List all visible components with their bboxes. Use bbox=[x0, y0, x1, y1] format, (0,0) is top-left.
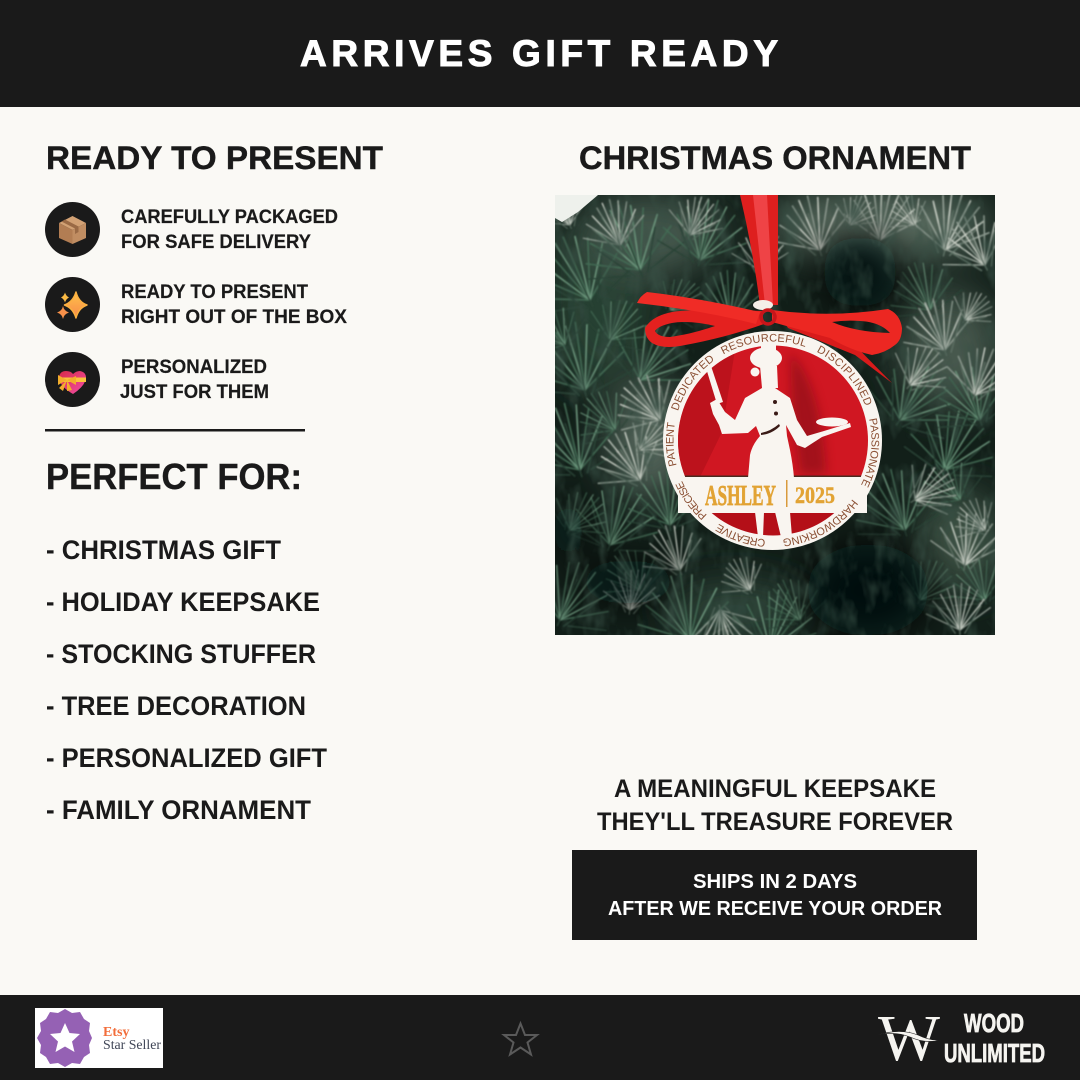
engraved ring words: PATIENT bbox=[666, 422, 676, 466]
benefit: carefully packaged bbox=[45, 202, 338, 257]
list: perfect for items: - HOLIDAY KEEPSAKE bbox=[46, 587, 320, 617]
logo: wood unlimited: WOOD bbox=[964, 1008, 1024, 1038]
ribbon: bow bbox=[637, 292, 902, 383]
badge: etsy star seller: Etsy bbox=[103, 1025, 129, 1040]
benefit: personalized bbox=[45, 352, 269, 407]
title: ARRIVES GIFT READY bbox=[300, 33, 778, 74]
name band bbox=[678, 477, 867, 513]
right tail bbox=[786, 322, 892, 383]
list: perfect for items: - STOCKING STUFFER bbox=[46, 639, 316, 669]
ribbon: hanging strap bbox=[740, 195, 778, 305]
benefit text: RIGHT OUT OF THE BOX bbox=[121, 306, 347, 328]
heading: perfect for: PERFECT FOR: bbox=[46, 456, 302, 497]
engraved ring words: PASSIONATE bbox=[861, 418, 880, 488]
engraved ring words: PRECISE bbox=[676, 481, 706, 520]
footer bar bbox=[0, 995, 1080, 1080]
benefit text: FOR SAFE DELIVERY bbox=[121, 231, 311, 253]
frosted tufts bbox=[778, 195, 848, 256]
heading: ready to present: READY TO PRESENT bbox=[46, 140, 383, 176]
tagline: THEY'LL TREASURE FOREVER bbox=[597, 808, 953, 836]
list: perfect for items: - TREE DECORATION bbox=[46, 691, 306, 721]
engraved ring words: DEDICATED bbox=[671, 356, 713, 410]
logo: wood unlimited: W bbox=[878, 1002, 941, 1075]
logo: wood unlimited bbox=[878, 1002, 1045, 1075]
benefit text bbox=[121, 281, 347, 328]
chef silhouette bbox=[706, 336, 851, 537]
icon: package box bbox=[45, 202, 100, 257]
green tufts bbox=[555, 235, 626, 312]
photo: ornament on pine tree bbox=[555, 195, 995, 635]
shipping callout: AFTER WE RECEIVE YOUR ORDER bbox=[608, 898, 943, 920]
ornament disc bbox=[663, 331, 882, 550]
left loop bbox=[645, 310, 764, 347]
list: perfect for items bbox=[46, 535, 327, 825]
icon: outlined star bbox=[504, 1024, 537, 1054]
heading: christmas ornament: CHRISTMAS ORNAMENT bbox=[579, 140, 971, 176]
list: perfect for items: - CHRISTMAS GIFT bbox=[46, 535, 281, 565]
engraved ring words bbox=[666, 334, 880, 547]
badge: etsy star seller bbox=[35, 1008, 163, 1068]
benefit text: CAREFULLY PACKAGED bbox=[121, 206, 338, 228]
icon: sparkles bbox=[45, 277, 100, 332]
engraved year: 2025 bbox=[795, 483, 835, 508]
engraved ring words: HARDWORKING bbox=[783, 500, 858, 546]
benefit text: PERSONALIZED bbox=[121, 356, 267, 378]
list: perfect for items: - FAMILY ORNAMENT bbox=[46, 795, 311, 825]
benefit text: READY TO PRESENT bbox=[121, 281, 308, 303]
engraved ring words: CREATIVE bbox=[715, 524, 765, 547]
benefit text: JUST FOR THEM bbox=[120, 381, 269, 403]
right loop bbox=[772, 309, 902, 355]
engraved ring words: DISCIPLINED bbox=[817, 345, 872, 405]
engraved name: ASHLEY bbox=[705, 480, 776, 512]
icon: heart with ribbon bbox=[45, 352, 100, 407]
left tail bbox=[637, 292, 760, 324]
red backing bbox=[678, 346, 868, 536]
header bar bbox=[0, 0, 1080, 107]
tagline bbox=[597, 775, 953, 836]
tagline: A MEANINGFUL KEEPSAKE bbox=[614, 775, 936, 803]
chef details bbox=[761, 400, 780, 435]
list: perfect for items: - PERSONALIZED GIFT bbox=[46, 743, 327, 773]
engraved ring words: RESOURCEFUL bbox=[720, 334, 806, 354]
benefit text bbox=[121, 206, 338, 253]
benefit text bbox=[120, 356, 269, 403]
ornament bbox=[663, 331, 882, 550]
badge: etsy star seller: Star Seller bbox=[103, 1038, 161, 1053]
shipping callout: SHIPS IN 2 DAYS bbox=[693, 871, 857, 893]
benefit: ready to present bbox=[45, 277, 347, 332]
shipping callout bbox=[572, 850, 977, 940]
